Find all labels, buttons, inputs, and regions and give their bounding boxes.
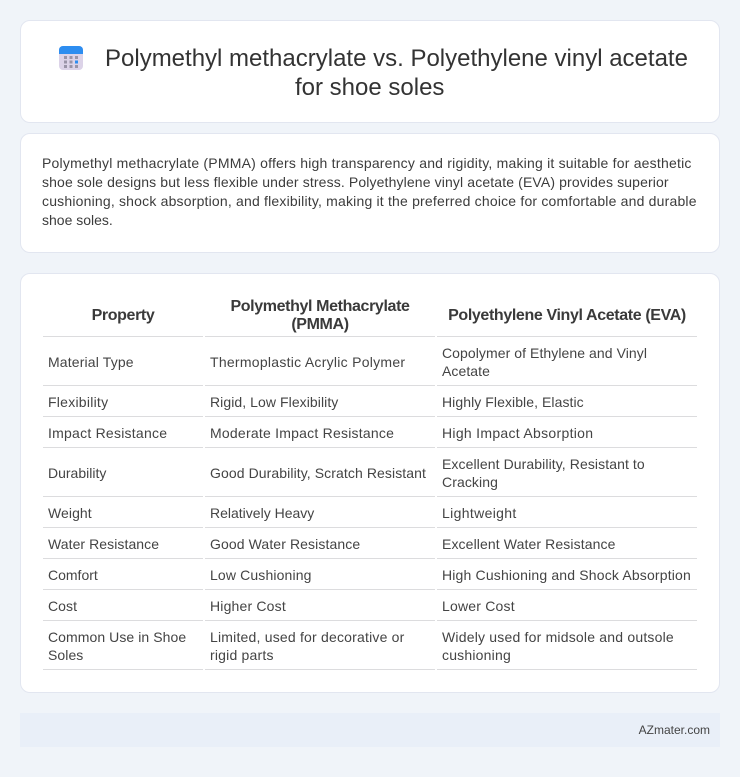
comparison table: Thermoplastic Acrylic Polymer: [210, 354, 405, 370]
comparison table: Water Resistance: [48, 536, 159, 552]
comparison table: Relatively Heavy: [210, 505, 314, 521]
comparison table: (PMMA): [291, 316, 349, 333]
title: Polymethyl methacrylate vs. Polyethylene vinyl acetate: [105, 45, 688, 72]
comparison table: Acetate: [442, 363, 490, 379]
footer bar: [20, 713, 720, 747]
comparison table: Impact Resistance: [48, 425, 167, 441]
intro text: cushioning, shock absorption, and flexibility, making it the preferred choice for comfortable and durable: [42, 193, 697, 209]
comparison table: High Impact Absorption: [442, 425, 593, 441]
comparison table: Soles: [48, 647, 83, 663]
intro card: [20, 133, 720, 253]
comparison table: Rigid, Low Flexibility: [210, 394, 338, 410]
comparison table: High Cushioning and Shock Absorption: [442, 567, 691, 583]
comparison table: rigid parts: [210, 647, 274, 663]
comparison table: Limited, used for decorative or: [210, 629, 405, 645]
comparison table: Widely used for midsole and outsole: [442, 629, 674, 645]
comparison table: Polymethyl Methacrylate: [230, 298, 410, 315]
intro text: shoe sole designs but less flexible under stress. Polyethylene vinyl acetate (EVA) provides superior: [42, 174, 669, 190]
comparison table: Copolymer of Ethylene and Vinyl: [442, 345, 647, 361]
comparison table: Durability: [48, 465, 106, 481]
title: [105, 45, 688, 101]
table card: [20, 273, 720, 693]
intro text: Polymethyl methacrylate (PMMA) offers high transparency and rigidity, making it suitable for aesthetic: [42, 155, 692, 171]
comparison table: Lower Cost: [442, 598, 515, 614]
comparison table: Polyethylene Vinyl Acetate (EVA): [448, 307, 686, 324]
comparison table: Highly Flexible, Elastic: [442, 394, 584, 410]
comparison table: [43, 298, 697, 670]
comparison table: Excellent Water Resistance: [442, 536, 616, 552]
comparison table: Excellent Durability, Resistant to: [442, 456, 645, 472]
comparison table: Flexibility: [48, 394, 108, 410]
comparison table: Higher Cost: [210, 598, 286, 614]
comparison table: Property: [92, 307, 154, 324]
comparison table: Weight: [48, 505, 92, 521]
comparison table: Comfort: [48, 567, 98, 583]
comparison table: Cracking: [442, 474, 498, 490]
comparison table: Material Type: [48, 354, 134, 370]
comparison table: Moderate Impact Resistance: [210, 425, 394, 441]
footer text: AZmater.com: [639, 723, 710, 737]
intro text: shoe soles.: [42, 212, 113, 228]
comparison table: Good Water Resistance: [210, 536, 360, 552]
comparison table: Cost: [48, 598, 77, 614]
icon: calendar: [59, 46, 83, 70]
comparison table: Lightweight: [442, 505, 517, 521]
comparison table: Good Durability, Scratch Resistant: [210, 465, 426, 481]
comparison table: Common Use in Shoe: [48, 629, 186, 645]
title: for shoe soles: [295, 74, 444, 101]
title card: [20, 20, 720, 123]
comparison table: Low Cushioning: [210, 567, 312, 583]
intro text: [42, 155, 697, 228]
comparison table: cushioning: [442, 647, 511, 663]
